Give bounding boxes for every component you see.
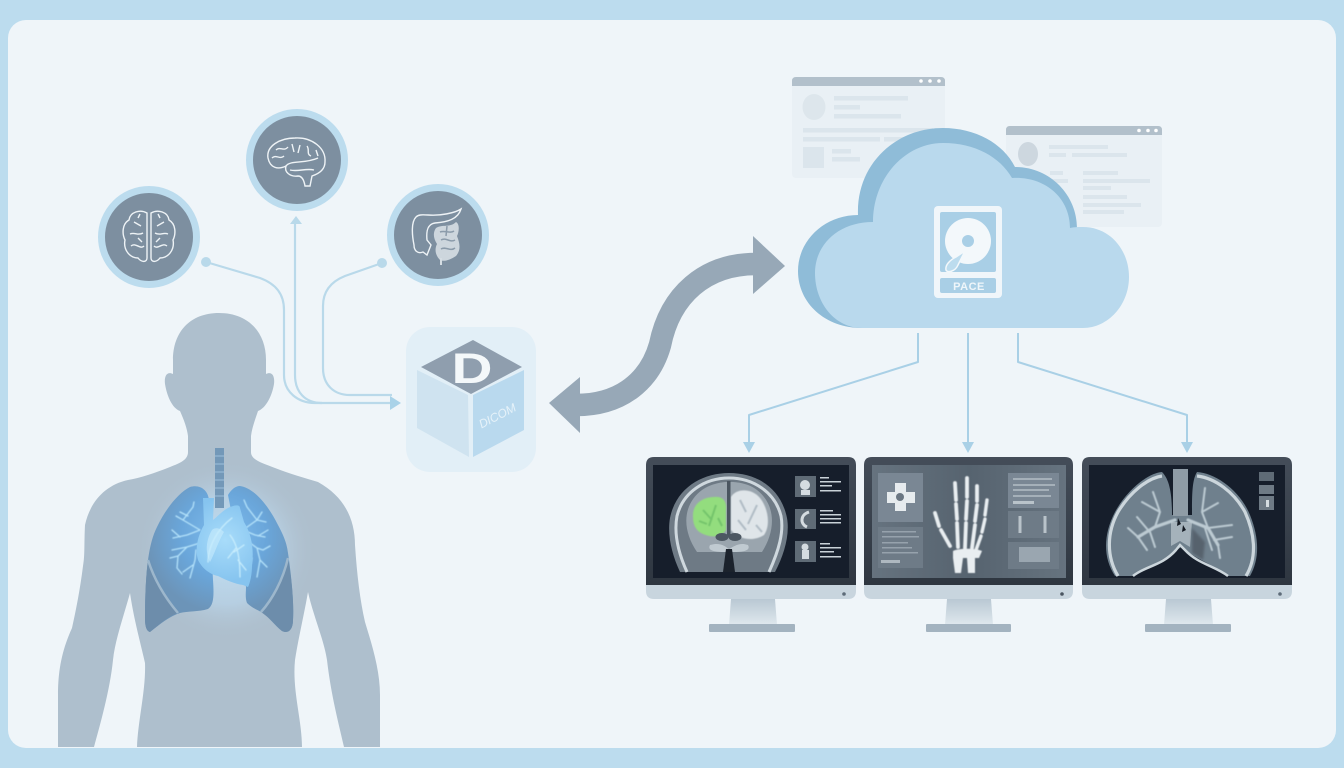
cloud back layer — [798, 128, 1077, 328]
scan side widgets — [795, 476, 841, 562]
arrowhead to monitor 3 — [1181, 442, 1193, 453]
human silhouette with lungs and heart — [58, 313, 380, 747]
bronchial branches — [170, 500, 270, 578]
right lung — [228, 486, 293, 632]
arrowhead to monitor 1 — [743, 442, 755, 453]
report panel left — [878, 527, 923, 568]
monitor: lung x-ray — [1082, 457, 1292, 632]
cube top face — [421, 340, 522, 394]
left lung — [145, 486, 213, 632]
cloud front layer — [815, 143, 1129, 328]
brain scan image — [669, 473, 788, 572]
heart — [197, 498, 253, 587]
icon: brain top view — [102, 190, 196, 284]
connector dot right — [377, 258, 387, 268]
connectors from organs to DICOM — [206, 222, 392, 403]
icon: PACS hard drive — [934, 206, 1002, 298]
connectors from cloud to monitors — [749, 333, 1187, 445]
icon: brain side view — [250, 112, 344, 208]
D logo letter: D — [452, 345, 492, 393]
lower lung lobes — [145, 558, 293, 632]
connector dot left — [201, 257, 211, 267]
chest glow — [136, 460, 316, 640]
cube right face — [473, 370, 524, 457]
cube left face — [417, 370, 469, 457]
body silhouette — [58, 313, 380, 747]
cloud storage — [798, 128, 1129, 328]
hand x-ray image — [935, 478, 987, 573]
arrowhead into DICOM — [390, 396, 401, 410]
patient record window left — [792, 77, 945, 178]
medical cross panel — [878, 473, 923, 522]
double-headed curved arrow — [549, 236, 785, 433]
monitor: brain scan — [646, 457, 856, 632]
patient record window right — [1006, 126, 1162, 227]
DICOM cube tile — [406, 327, 536, 472]
monitor: hand x-ray — [864, 457, 1073, 632]
arrowhead up — [290, 216, 302, 224]
DICOM label: DICOM — [476, 401, 518, 431]
PACE label: PACE — [953, 281, 985, 293]
arrowhead to monitor 2 — [962, 442, 974, 453]
lobe dividers — [148, 558, 288, 613]
icon: intestines — [390, 188, 486, 282]
thumbnail panels right — [1008, 473, 1059, 569]
lung x-ray image — [1106, 469, 1257, 576]
trachea — [215, 448, 224, 508]
lung side widgets — [1259, 472, 1274, 510]
